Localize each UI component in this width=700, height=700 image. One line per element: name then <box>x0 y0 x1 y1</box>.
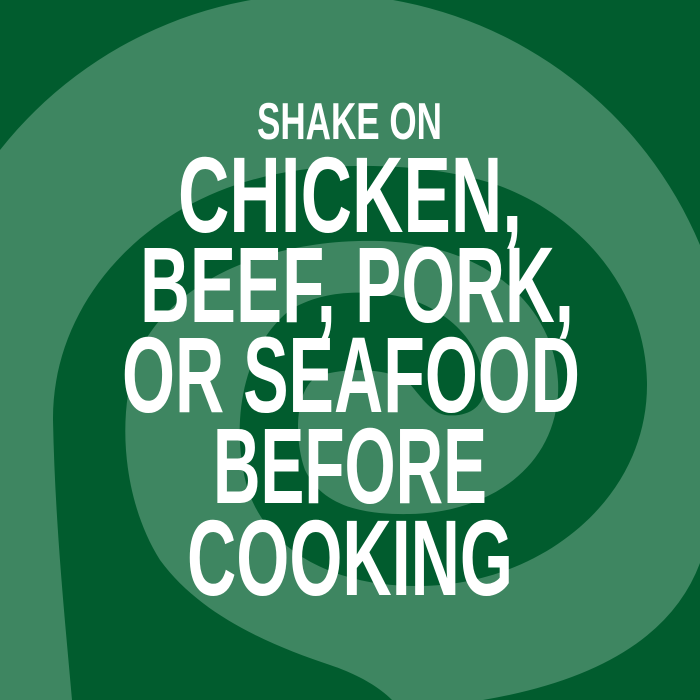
text: COOKING: COOKING <box>187 497 513 618</box>
text: CHICKEN,: CHICKEN, <box>178 134 522 255</box>
text block: headline <box>122 93 580 618</box>
dark spiral band <box>53 166 647 700</box>
text: SHAKE ON: SHAKE ON <box>257 93 442 151</box>
text: BEFORE: BEFORE <box>213 405 487 526</box>
